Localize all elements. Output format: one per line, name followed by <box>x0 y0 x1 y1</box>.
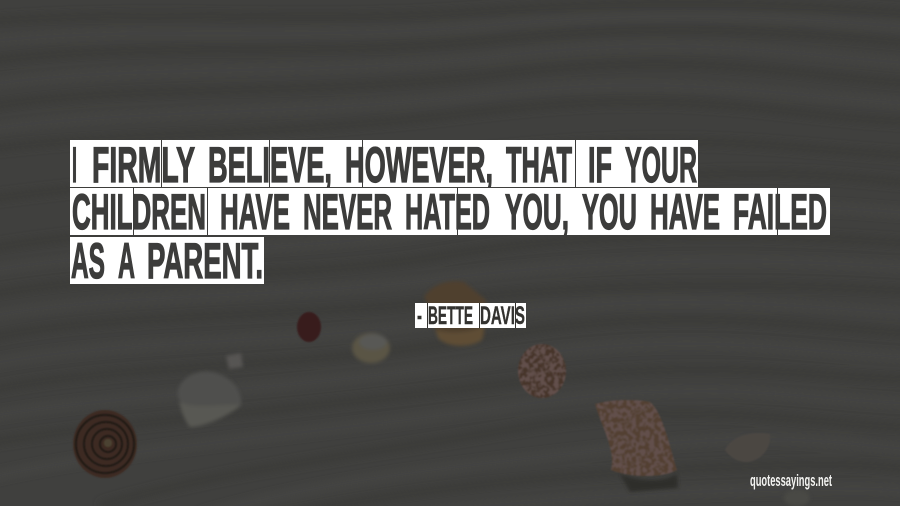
quote line 1: IF <box>588 137 612 193</box>
quote line 2: CHILDREN <box>72 184 206 240</box>
quote line 2: YOU, <box>505 184 569 240</box>
quote line 2: HATED <box>405 184 490 240</box>
quote line 2 <box>70 184 830 240</box>
quote line 1: I <box>72 137 77 193</box>
attribution: Bette Davis: BETTE <box>428 302 473 330</box>
icon: top tan shell <box>424 281 486 346</box>
quote line 1: HOWEVER, <box>345 137 493 193</box>
watermark: site name: quotessayings.net <box>750 471 832 490</box>
icon: large brown shell <box>595 400 678 492</box>
quote line 3: AS <box>71 233 105 289</box>
quote line 3: A <box>118 233 135 289</box>
icon: spiral shell <box>73 410 137 478</box>
attribution: Bette Davis: DAVIS <box>480 302 525 330</box>
quote line 1: THAT <box>506 137 572 193</box>
icon: white shell <box>178 353 243 427</box>
quote line 1: FIRMLY <box>92 137 195 193</box>
quote line 1: YOUR <box>625 137 697 193</box>
quote line 3 <box>70 233 264 289</box>
quote line 1 <box>70 137 698 193</box>
quote line 2: NEVER <box>303 184 392 240</box>
quote line 3: PARENT. <box>147 233 263 289</box>
quote line 2: HAVE <box>220 184 290 240</box>
attribution: Bette Davis: - <box>417 302 422 330</box>
icon: pale shell <box>352 333 390 363</box>
icon: round brown shell <box>518 344 566 398</box>
icon: grey shell <box>725 433 770 462</box>
icon: faint shell at bottom <box>784 490 810 506</box>
quote line 1: BELIEVE, <box>208 137 332 193</box>
icon: dark red bead <box>297 312 321 342</box>
quote text block <box>70 137 830 289</box>
quote line 2: HAVE <box>650 184 720 240</box>
quote line 2: YOU <box>582 184 637 240</box>
